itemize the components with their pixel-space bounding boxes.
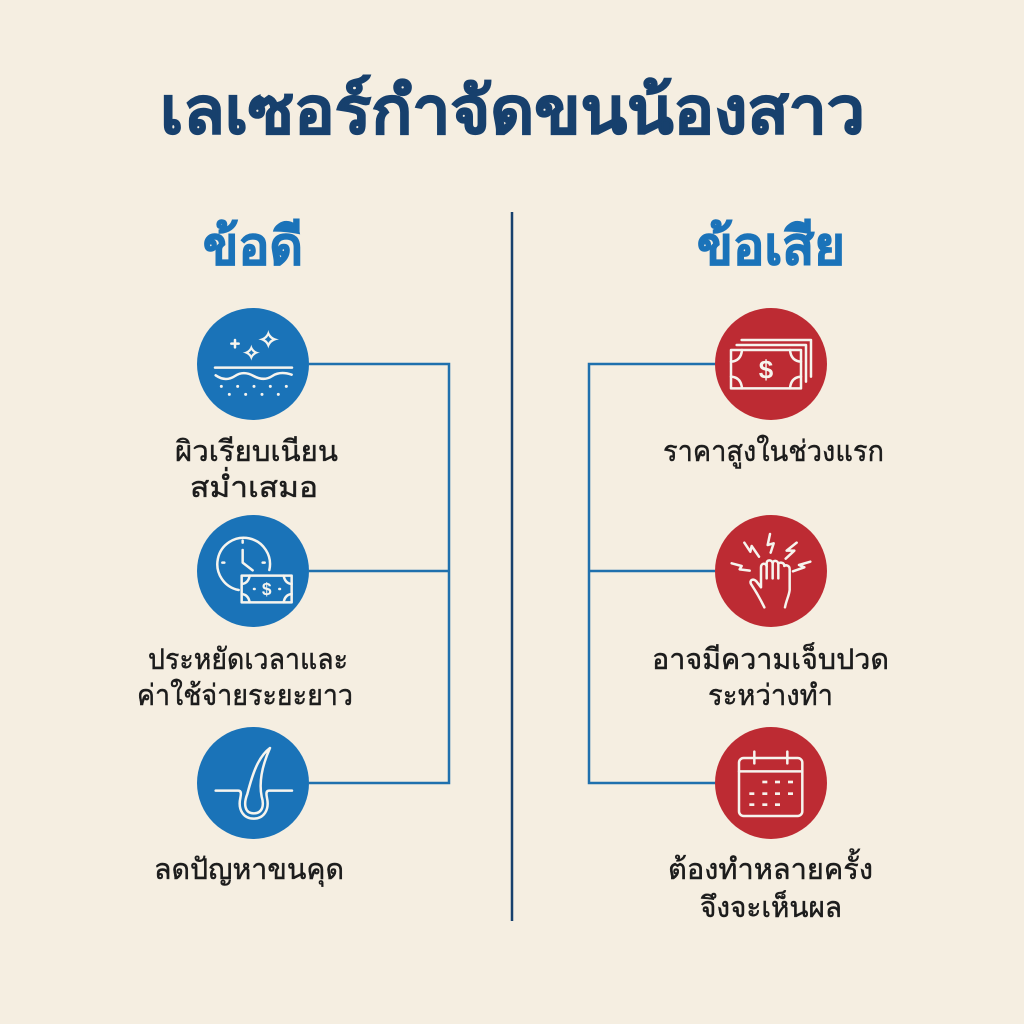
label: multiple sessions: จึงจะเห็นผล (700, 889, 842, 924)
label: smooth skin (175, 436, 338, 504)
icon: clock and money (197, 515, 309, 627)
heading: cons: ข้อเสีย (697, 218, 845, 276)
connector: pros (309, 364, 449, 783)
icon: painful hand (715, 515, 827, 627)
label: save time and cost: ประหยัดเวลาและ (148, 644, 348, 676)
label: save time and cost: ค่าใช้จ่ายระยะยาว (137, 678, 353, 712)
icon: clock and money: $ (262, 579, 272, 599)
icon: smooth skin (197, 308, 309, 420)
icon: calendar (715, 727, 827, 839)
label: smooth skin: สม่ำเสมอ (190, 467, 318, 504)
connector: cons (589, 364, 715, 783)
label: multiple sessions (668, 848, 873, 924)
label: possible pain: ระหว่างทำ (708, 680, 833, 712)
title: เลเซอร์กำจัดขนน้องสาว (160, 74, 865, 147)
icon: stack of money: $ (759, 354, 774, 384)
icon: stack of money (715, 308, 827, 420)
label: high initial cost: ราคาสูงในช่วงแรก (663, 434, 884, 469)
label: smooth skin: ผิวเรียบเนียน (175, 436, 338, 468)
label: possible pain: อาจมีความเจ็บปวด (652, 641, 889, 676)
heading: pros: ข้อดี (203, 218, 303, 276)
label: save time and cost (137, 644, 353, 712)
icon: hair follicle (197, 727, 309, 839)
label: multiple sessions: ต้องทำหลายครั้ง (668, 848, 873, 886)
label: ingrown hair: ลดปัญหาขนคุด (154, 854, 344, 887)
centre divider (511, 212, 513, 921)
label: possible pain (652, 641, 889, 712)
